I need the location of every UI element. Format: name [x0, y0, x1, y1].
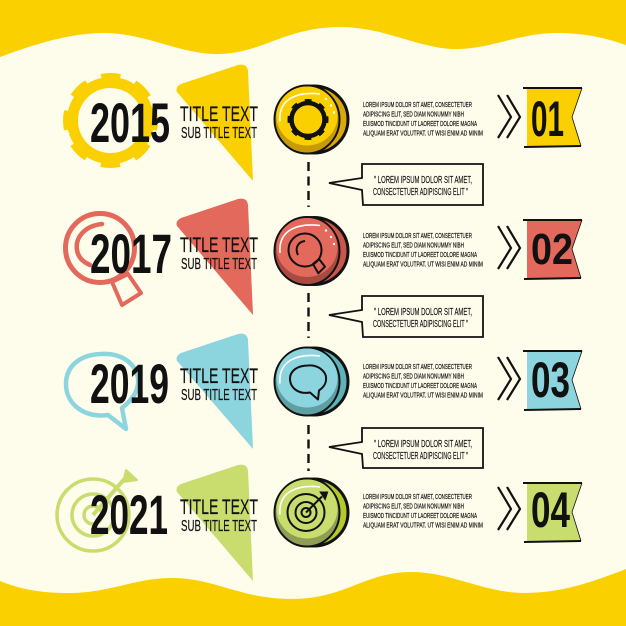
icon: large yellow gear	[66, 76, 154, 164]
title and subtitle	[180, 234, 258, 273]
body copy: ADIPISCING ELIT, SED DIAM NONUMMY NIBH	[363, 110, 464, 118]
body copy	[363, 231, 483, 268]
body copy: ALIQUAM ERAT VOLUTPAT. UT WISI ENIM AD MINIM	[363, 128, 483, 138]
callout 1: " LOREM IPSUM DOLOR SIT AMET,	[374, 174, 472, 186]
year 2017: 2017	[90, 222, 172, 285]
row 1: 2015	[66, 65, 582, 181]
row 3: 2019	[66, 334, 582, 449]
body copy: LOREM IPSUM DOLOR SIT AMET, CONSECTETUER	[363, 492, 472, 501]
top yellow wave	[0, 0, 626, 57]
arrow: double chevron	[498, 487, 520, 530]
body copy: EUISMOD TINCIDUNT UT LAOREET DOLORE MAGNA	[363, 119, 477, 128]
body copy	[363, 492, 483, 530]
title and subtitle: TITLE TEXT	[180, 496, 258, 519]
triangle: green	[176, 465, 253, 581]
body copy: ALIQUAM ERAT VOLUTPAT. UT WISI ENIM AD MINIM	[363, 260, 483, 268]
arrow: double chevron	[498, 226, 520, 269]
body copy: LOREM IPSUM DOLOR SIT AMET, CONSECTETUER	[363, 231, 472, 240]
body copy: ADIPISCING ELIT, SED DIAM NONUMMY NIBH	[363, 502, 464, 510]
triangle: blue	[176, 334, 253, 449]
title and subtitle: SUB TITLE TEXT	[181, 387, 257, 404]
button: magnifier	[274, 217, 348, 285]
body copy: EUISMOD TINCIDUNT UT LAOREET DOLORE MAGNA	[363, 250, 477, 259]
body copy: ALIQUAM ERAT VOLUTPAT. UT WISI ENIM AD MINIM	[363, 390, 483, 400]
body copy: ALIQUAM ERAT VOLUTPAT. UT WISI ENIM AD MINIM	[363, 520, 483, 530]
button: gear	[274, 86, 348, 154]
year 2019: 2019	[90, 352, 169, 415]
title and subtitle	[180, 103, 258, 142]
triangle: yellow	[176, 65, 253, 181]
callout 2: CONSECTETUER ADIPISCING ELIT "	[373, 318, 468, 330]
row 4: 2021	[57, 465, 582, 581]
title and subtitle: SUB TITLE TEXT	[181, 518, 257, 535]
callout 1: CONSECTETUER ADIPISCING ELIT "	[373, 186, 468, 198]
year 2015: 2015	[90, 91, 170, 154]
body copy: EUISMOD TINCIDUNT UT LAOREET DOLORE MAGNA	[363, 381, 477, 390]
body copy	[363, 100, 483, 138]
body copy: EUISMOD TINCIDUNT UT LAOREET DOLORE MAGNA	[363, 511, 477, 520]
body copy: ADIPISCING ELIT, SED DIAM NONUMMY NIBH	[363, 240, 464, 250]
flag: 03: 03	[531, 352, 570, 408]
triangle: coral	[176, 199, 253, 315]
title and subtitle	[180, 496, 258, 535]
body copy: LOREM IPSUM DOLOR SIT AMET, CONSECTETUER	[363, 100, 472, 109]
icon: large blue speech bubble	[66, 354, 138, 429]
button: target	[274, 478, 348, 546]
bottom yellow wave	[0, 569, 626, 626]
callout 3: " LOREM IPSUM DOLOR SIT AMET,	[374, 438, 472, 450]
callout 2: " LOREM IPSUM DOLOR SIT AMET,	[374, 306, 472, 318]
callout 1	[329, 164, 483, 205]
title and subtitle: TITLE TEXT	[180, 103, 258, 126]
body copy: LOREM IPSUM DOLOR SIT AMET, CONSECTETUER	[363, 362, 472, 371]
title and subtitle	[180, 365, 258, 404]
flag: 04: 04	[531, 482, 570, 538]
flag: 01: 01	[531, 91, 564, 147]
icon: large green target	[57, 470, 137, 551]
arrow: double chevron	[498, 357, 520, 400]
callout 3	[329, 428, 483, 468]
year 2021: 2021	[90, 483, 168, 546]
title and subtitle: SUB TITLE TEXT	[181, 256, 257, 273]
callout 3: CONSECTETUER ADIPISCING ELIT "	[373, 450, 468, 462]
timeline dashed connectors	[307, 162, 310, 471]
callout 2	[329, 296, 483, 337]
row 2: 2017	[66, 199, 582, 315]
flag: 02: 02	[531, 225, 573, 274]
title and subtitle: TITLE TEXT	[180, 234, 258, 257]
title and subtitle: SUB TITLE TEXT	[181, 125, 257, 142]
title and subtitle: TITLE TEXT	[180, 365, 258, 388]
arrow: double chevron	[498, 95, 520, 138]
flag: 02	[523, 220, 582, 279]
icon: large coral magnifier	[66, 214, 141, 305]
body copy: ADIPISCING ELIT, SED DIAM NONUMMY NIBH	[363, 372, 464, 380]
button: speech bubble	[274, 348, 348, 416]
body copy	[363, 362, 483, 400]
